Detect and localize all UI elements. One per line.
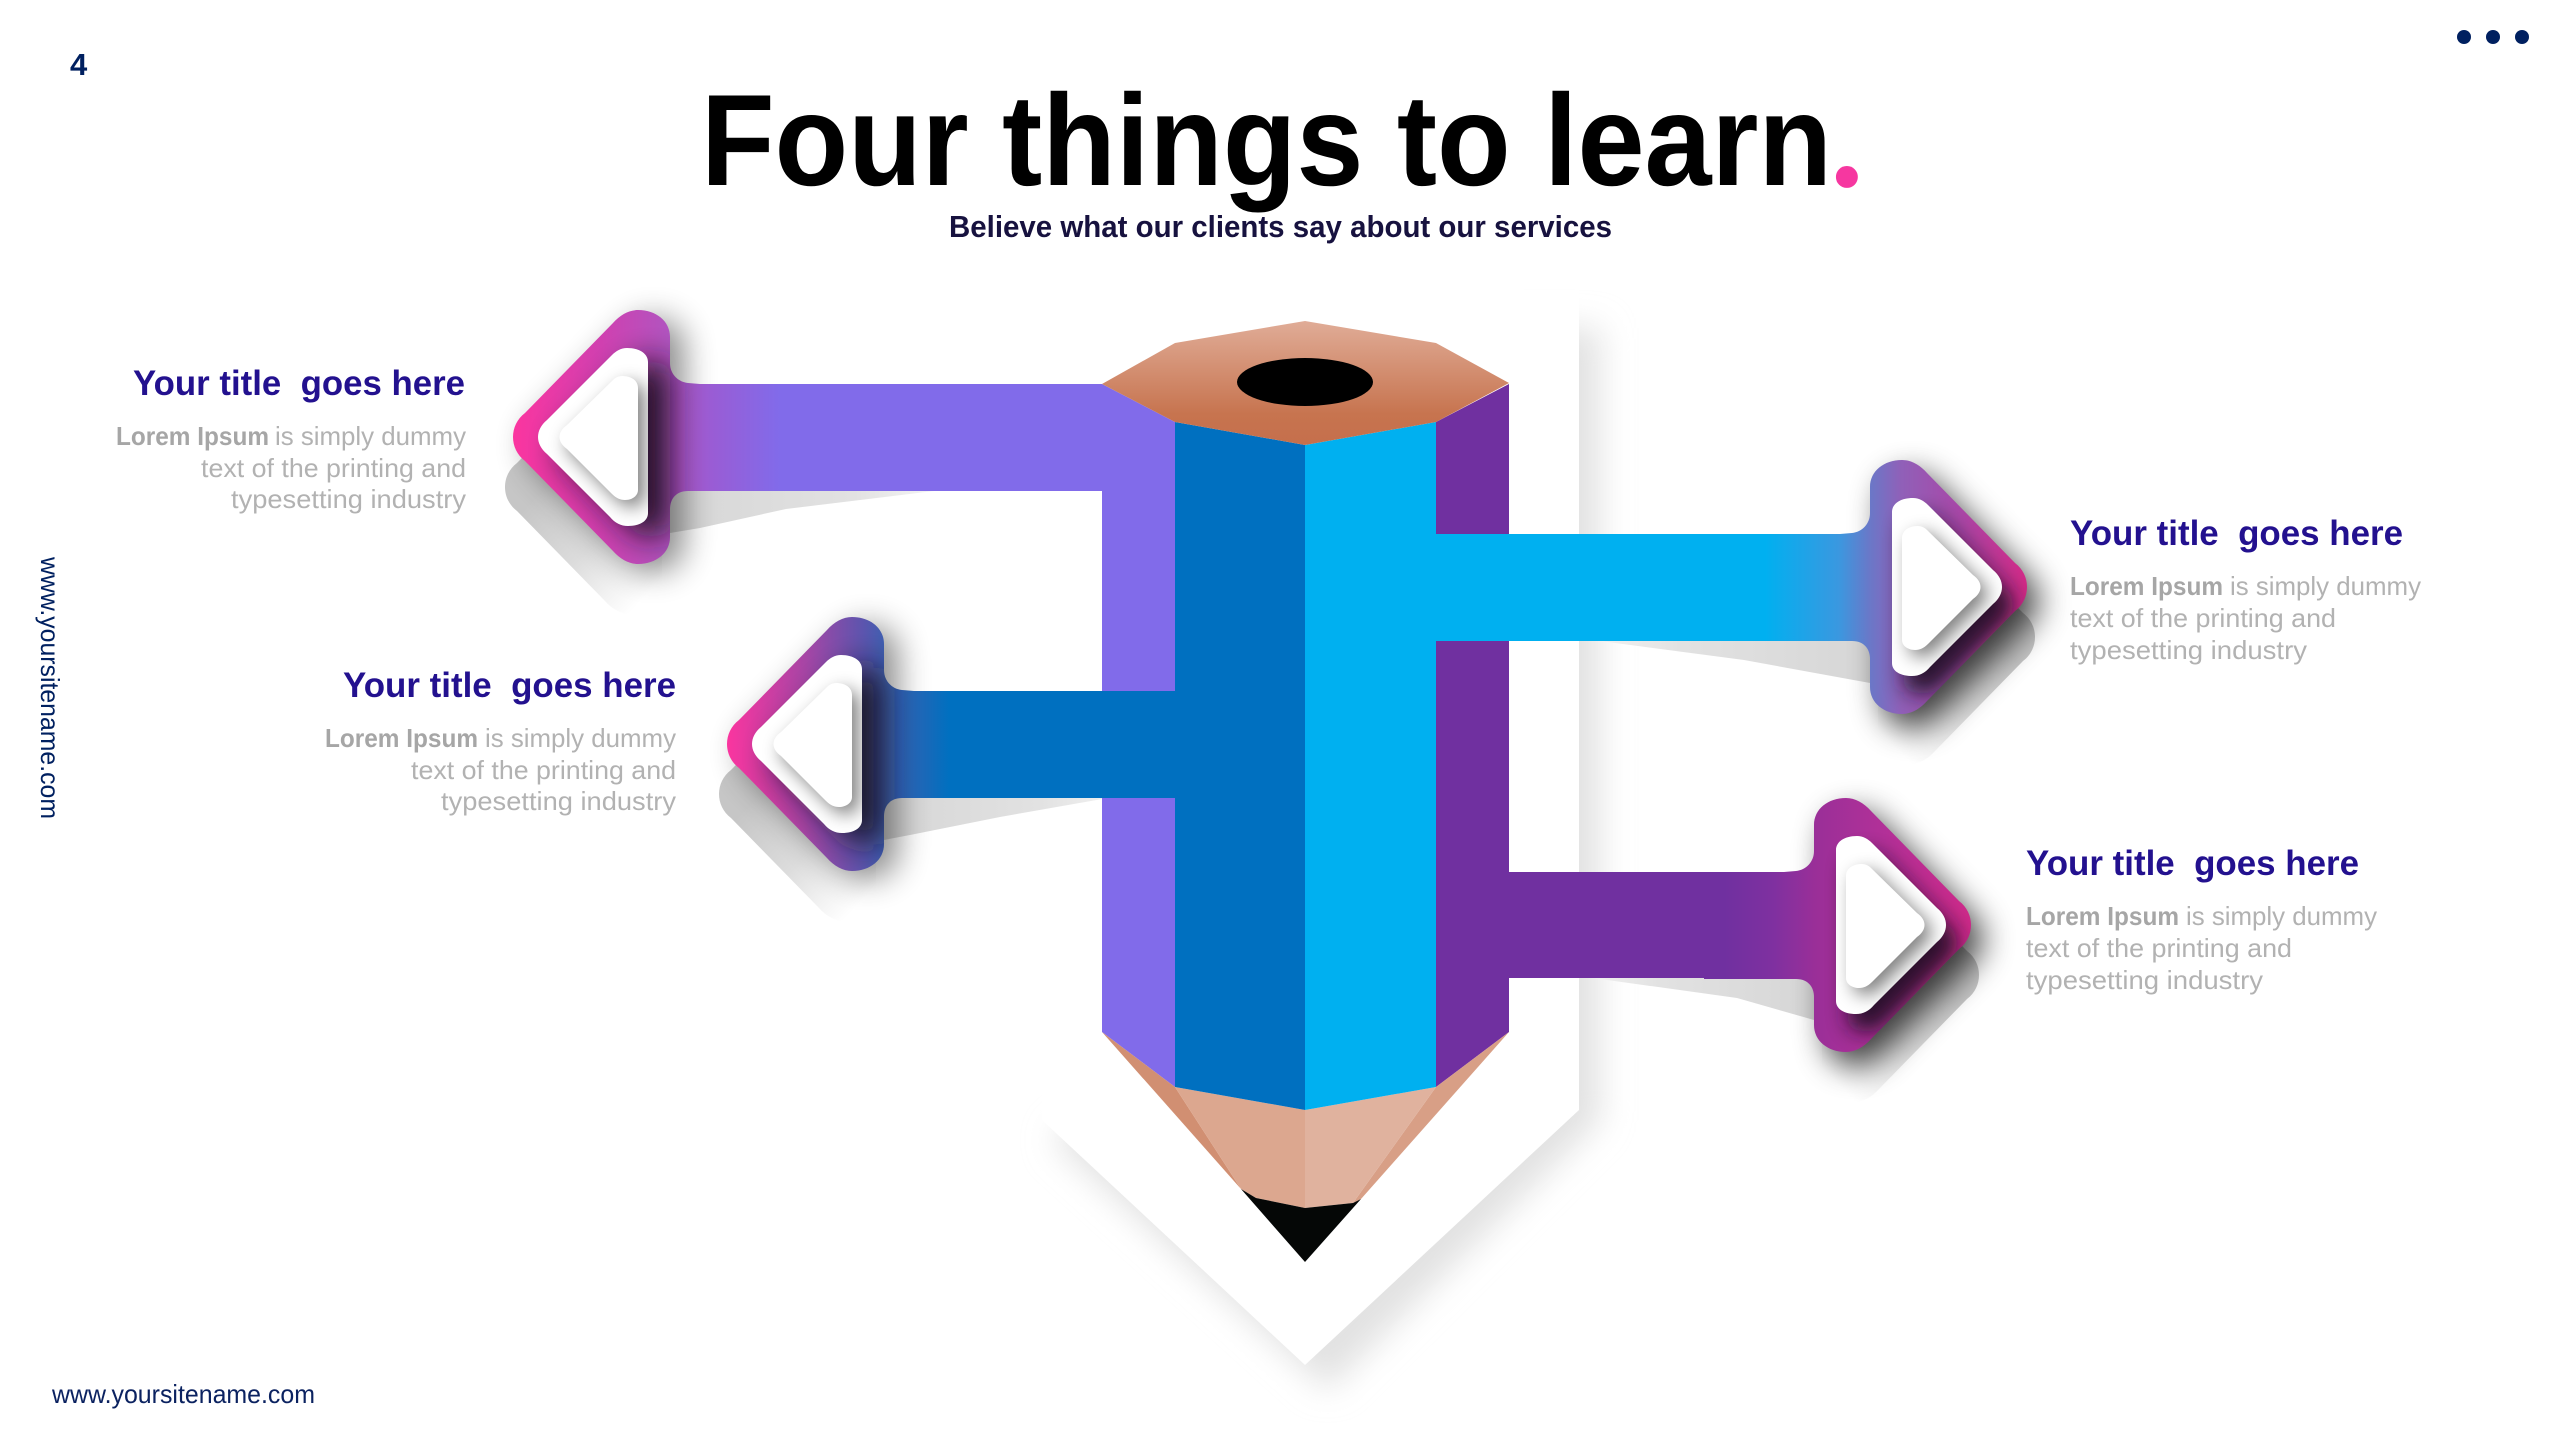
body 1: typesetting industry	[231, 484, 466, 514]
arm shadow wedge 4	[1593, 978, 1814, 1020]
body 2: is simply dummy	[485, 723, 676, 753]
arrow 1 body	[513, 310, 780, 564]
body 3	[2070, 571, 2421, 665]
body 1	[116, 421, 466, 514]
arrow 2 ground shadow	[719, 667, 876, 921]
text block 1	[116, 364, 466, 514]
body 3: Lorem Ipsum	[2070, 571, 2223, 601]
arrow 4 white triangle	[1846, 864, 1924, 988]
body 4: is simply dummy	[2186, 901, 2377, 931]
arrow 2	[719, 606, 941, 912]
heading 2: Your title goes here	[343, 666, 676, 705]
pencil top facet	[1102, 321, 1509, 445]
pencil lead tip	[1241, 1189, 1361, 1262]
body 2: typesetting industry	[441, 786, 676, 816]
arrow 2 plate shadow	[780, 690, 859, 814]
arm bar: violet	[770, 384, 1102, 491]
arm shadow wedge 3	[1600, 641, 1870, 683]
arrow 2 white plate	[752, 655, 862, 833]
body 1: Lorem Ipsum	[116, 421, 269, 451]
text block 4	[2026, 844, 2377, 995]
arm bar: purple	[1509, 872, 1789, 978]
arrow 4 ground shadow	[1822, 848, 1979, 1102]
pencil side: left violet	[1102, 384, 1175, 1087]
arrow 1	[505, 310, 780, 614]
body 2: text of the printing and	[411, 755, 676, 785]
page number: 4	[70, 47, 88, 82]
arrow 3 soft shadow	[1882, 474, 2039, 728]
pencil wood: outer left	[1102, 1032, 1241, 1189]
arrow 4 plate shadow	[1853, 871, 1932, 995]
arrow 2 soft shadow	[741, 625, 898, 879]
arm bar: blue	[940, 691, 1175, 798]
heading 3: Your title goes here	[2070, 514, 2403, 553]
body 4: text of the printing and	[2026, 933, 2292, 963]
arrow 3 ground shadow	[1878, 510, 2035, 764]
arrow 1 soft shadow	[527, 318, 684, 572]
menu dots	[2457, 30, 2529, 44]
pencil side: blue	[1175, 422, 1305, 1110]
body 2: Lorem Ipsum	[325, 723, 478, 753]
footer website text: www.yoursitename.com	[51, 1379, 315, 1409]
text block 3	[2070, 514, 2421, 665]
arm shadow wedge 2	[884, 798, 1108, 840]
arrow 1 white plate	[538, 348, 648, 526]
arrow 2 white triangle	[774, 683, 852, 807]
heading 1: Your title goes here	[133, 364, 465, 403]
arrow 3 inner shadow	[1904, 516, 2014, 694]
pencil wood: inner left	[1175, 1087, 1305, 1208]
arm shadow wedge 1	[670, 491, 934, 533]
arrow 1 plate shadow	[566, 383, 645, 507]
body 3: text of the printing and	[2070, 603, 2336, 633]
title: .	[1830, 67, 1864, 216]
arrow 3 white triangle	[1902, 526, 1980, 650]
arrow 4 white plate	[1836, 836, 1946, 1014]
heading 4: Your title goes here	[2026, 844, 2359, 883]
arrow 1 ground shadow	[505, 360, 662, 614]
arrow 4 inner shadow	[1848, 854, 1958, 1032]
arm bar: cyan	[1436, 534, 1770, 641]
arrow 3 plate shadow	[1909, 533, 1988, 657]
arrow 2 inner shadow	[774, 667, 884, 845]
pencil wood: outer right	[1353, 1032, 1509, 1203]
arrow 3 white plate	[1892, 498, 2002, 676]
body 3: is simply dummy	[2230, 571, 2421, 601]
pencil side: right purple	[1436, 384, 1509, 1087]
arrow 3 body	[1760, 460, 2027, 714]
body 1: text of the printing and	[201, 453, 466, 483]
arrow 4	[1704, 798, 1983, 1102]
subtitle: Believe what our clients say about our services	[949, 209, 1612, 244]
body 4	[2026, 901, 2377, 995]
arrow 3	[1760, 460, 2039, 764]
arrow 4 body	[1704, 798, 1971, 1052]
pencil top hole	[1237, 358, 1373, 406]
pencil backdrop with shadow	[1042, 290, 1600, 1390]
pencil side: cyan	[1305, 422, 1436, 1110]
arrow 4 soft shadow	[1826, 812, 1983, 1066]
text block 2	[325, 666, 676, 816]
arrow 2 body	[727, 617, 994, 871]
body 2	[325, 723, 676, 816]
body 3: typesetting industry	[2070, 635, 2307, 665]
body 4: Lorem Ipsum	[2026, 901, 2179, 931]
vertical website text: www.yoursitename.com	[35, 556, 65, 819]
arrow 1 inner shadow	[560, 360, 670, 538]
pencil	[1102, 321, 1509, 1262]
arrow 1 white triangle	[560, 376, 638, 500]
body 4: typesetting industry	[2026, 965, 2263, 995]
pencil wood: inner right	[1305, 1087, 1436, 1208]
title: Four things to learn	[701, 67, 1832, 213]
body 1: is simply dummy	[275, 421, 466, 451]
